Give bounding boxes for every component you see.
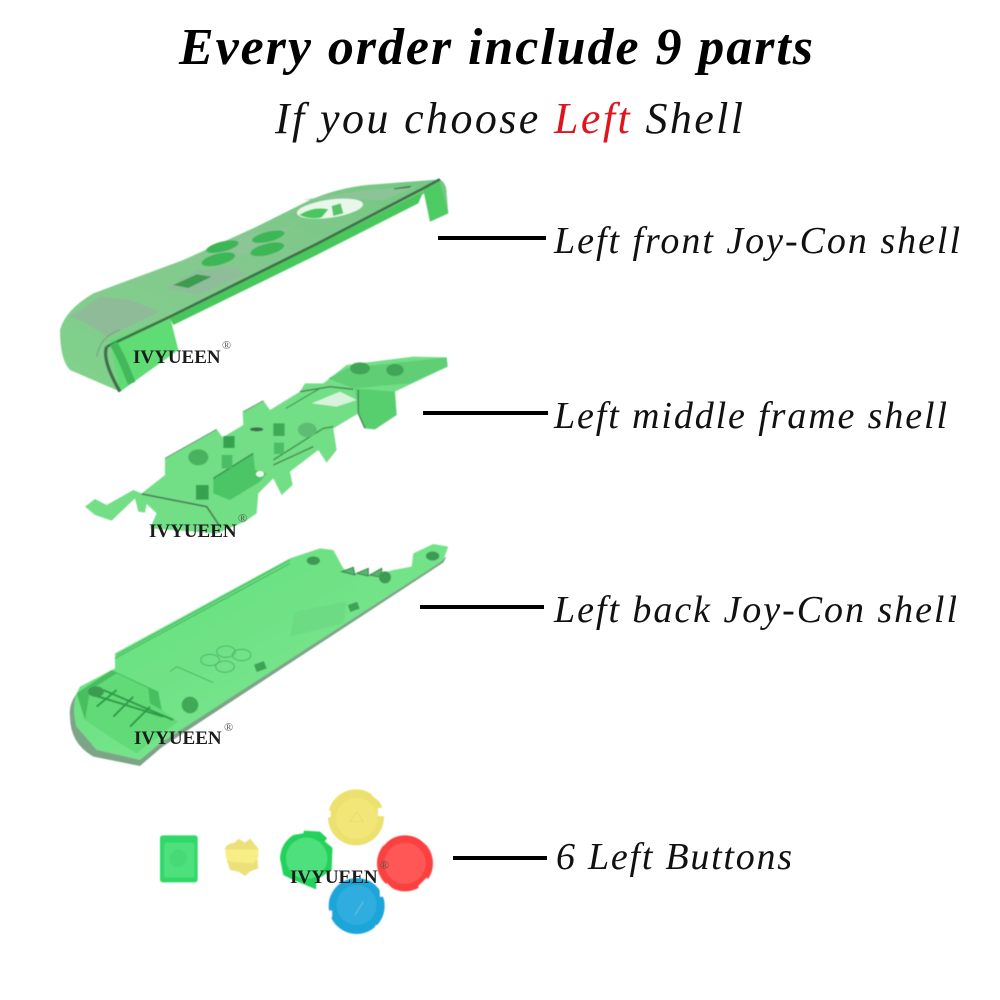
watermark: front shell	[133, 338, 231, 368]
part: left front Joy-Con shell	[60, 179, 448, 392]
leader line: front shell	[438, 236, 546, 240]
watermark: buttons	[290, 858, 389, 888]
watermark: buttons: ®	[380, 858, 389, 872]
button: yellow dpad	[322, 787, 388, 849]
label: buttons: 6 Left Buttons	[556, 836, 792, 878]
leader line: back shell	[420, 605, 544, 609]
watermark: middle frame	[149, 511, 247, 542]
button: red dpad	[377, 829, 434, 899]
part: six left buttons	[160, 787, 434, 935]
watermark: front shell: ®	[222, 338, 231, 352]
watermark: buttons: IVYUEEN	[290, 867, 378, 888]
watermark: back shell: ®	[224, 720, 233, 734]
leader line: buttons	[453, 856, 547, 860]
subtitle: If you choose Left Shell	[274, 94, 743, 143]
button: yellow small	[225, 839, 258, 876]
label: middle frame: Left middle frame shell	[553, 395, 947, 437]
title: Every order include 9 parts	[178, 19, 813, 76]
watermark: back shell	[134, 720, 233, 749]
label: back shell: Left back Joy-Con shell	[553, 589, 957, 631]
watermark: middle frame: IVYUEEN	[149, 521, 237, 542]
button: green dpad	[280, 831, 333, 889]
watermark: back shell: IVYUEEN	[134, 728, 222, 749]
button: blue dpad	[320, 875, 389, 935]
watermark: middle frame: ®	[238, 511, 247, 525]
leader line: middle frame	[423, 411, 548, 415]
label: front shell: Left front Joy-Con shell	[553, 220, 960, 262]
part: left middle frame shell	[85, 357, 448, 533]
watermark: front shell: IVYUEEN	[133, 347, 221, 368]
button: green square	[160, 835, 198, 882]
part: left back Joy-Con shell	[70, 544, 448, 766]
